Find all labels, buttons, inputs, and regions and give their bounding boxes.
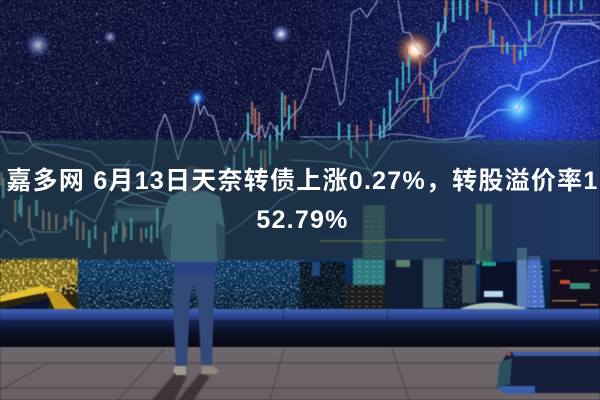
floor tiles (0, 347, 600, 400)
shoes (173, 366, 186, 375)
man standing from behind (152, 162, 225, 400)
candlesticks: lower left inside band (0, 172, 158, 254)
city: golden district (0, 258, 78, 310)
city skyline (0, 204, 600, 310)
jacket (160, 191, 225, 262)
rooftop ledge (0, 309, 600, 347)
trousers (173, 262, 216, 366)
shadow (152, 373, 210, 400)
background: night sky (0, 0, 600, 260)
glowing stars (25, 24, 550, 140)
title: 嘉多网 6月13日天奈转债上涨0.27%，转股溢价率1 (6, 167, 599, 195)
title (6, 167, 599, 234)
candlesticks: upper right (383, 0, 582, 138)
text band (0, 140, 600, 260)
price lines (0, 0, 600, 245)
candlesticks: centre (225, 92, 381, 185)
planter bench right (497, 352, 600, 400)
title: 52.79% (256, 206, 349, 234)
head (182, 163, 204, 189)
